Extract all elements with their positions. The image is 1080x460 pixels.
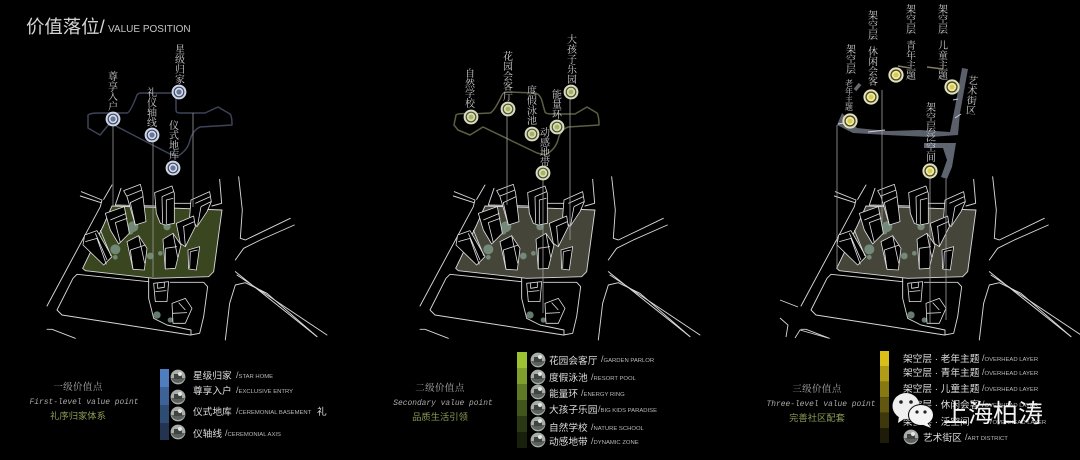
vertical labels: second level — [462, 33, 576, 167]
items: second level: 大孩子乐园 — [549, 403, 597, 416]
panel: second-level value map — [420, 33, 700, 340]
legend: third level — [767, 351, 1046, 444]
items: third level: /ART DISTRICT — [965, 432, 1008, 442]
colour bar: third level — [880, 351, 889, 443]
items: first level: /STAR HOME — [236, 370, 273, 380]
title — [26, 16, 191, 37]
items: third level: /OVERHEAD LAYER — [990, 416, 1046, 426]
vertical labels: third level: 架空层 — [904, 3, 916, 35]
items: first level: /CEREMONIAL BASEMENT — [236, 406, 312, 416]
vertical labels: first level — [106, 44, 184, 160]
account name: 上海柏涛 — [943, 400, 1043, 428]
vertical labels: third level: 休闲会客 — [866, 45, 878, 86]
overhead layer band — [837, 66, 968, 179]
items: second level: /DYNAMIC ZONE — [591, 436, 639, 446]
items: first level: /EXCLUSIVE ENTRY — [236, 385, 293, 395]
markers: second level — [464, 85, 578, 180]
items: first level: 星级归家 — [193, 369, 232, 382]
items: third level: /OVERHEAD LAYER — [982, 353, 1038, 363]
items: third level: 架空层 · 老年主题 — [903, 352, 980, 365]
vertical labels: first level: 仪式地库 — [166, 119, 178, 160]
items: second level: 能量环 — [549, 387, 578, 400]
heading: first level — [30, 381, 139, 421]
legend: second level — [393, 352, 657, 448]
site plan: second level — [420, 177, 700, 340]
vertical labels: second level: 动感地带 — [538, 126, 550, 167]
heading: third level — [767, 383, 876, 423]
route ring: first level — [88, 93, 232, 156]
items: third level: 艺术街区 — [923, 431, 962, 444]
items: third level: 架空层 · 泛空间 — [903, 415, 970, 428]
items: third level: 架空层 · 休闲会客 — [903, 398, 980, 411]
items: second level: 自然学校 — [549, 421, 588, 434]
colour bar: second level — [517, 352, 527, 448]
markers: first level — [106, 85, 186, 175]
icon: wechat bubbles — [892, 393, 934, 428]
heading: first level: First-level value point — [30, 398, 139, 407]
items: second level: 花园会客厅 — [549, 354, 598, 367]
vertical labels: second level: 度假泳池 — [524, 84, 536, 126]
items: first level: 礼 — [317, 405, 327, 418]
heading: second level: 二级价值点 — [415, 382, 465, 394]
colour bar: first level — [160, 369, 169, 440]
thumbnails: second level — [531, 353, 545, 447]
watermark: wechat logo and account name — [892, 393, 1043, 428]
vertical labels: third level: 儿童主题 — [936, 39, 948, 80]
heading: third level: 完善社区配套 — [789, 412, 845, 423]
vertical labels: second level: 自然学校 — [462, 67, 474, 109]
heading: second level — [393, 382, 493, 422]
connector lines: first level — [113, 113, 193, 277]
vertical labels: third level: 架空层 — [866, 9, 878, 41]
route ring: second level — [454, 92, 599, 155]
vertical labels: third level: 架空层 — [936, 3, 948, 35]
thumbnails: first level — [171, 370, 185, 439]
vertical labels: third level: 老年主题 — [844, 78, 854, 112]
heading: second level: 品质生活引领 — [412, 411, 468, 422]
site plan: first level — [47, 177, 327, 340]
vertical labels: first level: 尊享入户 — [106, 71, 118, 112]
items: second level: /GARDEN PARLOR — [601, 354, 654, 364]
vertical labels: third level: 艺术街区 — [963, 73, 978, 115]
heading: third level: 三级价值点 — [792, 383, 842, 395]
vertical labels: first level: 礼仪轴线 — [144, 86, 156, 128]
heading: third level: Three-level value point — [767, 400, 876, 409]
heading: first level: 礼序归家体系 — [50, 410, 106, 421]
items: first level: /CEREMONIAL AXIS — [225, 428, 281, 438]
items: second level: 动感地带 — [549, 435, 588, 448]
items: first level — [193, 369, 327, 440]
items: third level: /OVERHEAD LAYER — [982, 399, 1038, 409]
connector lines: second level — [507, 92, 570, 313]
title: 价值落位/ — [26, 16, 106, 37]
items: third level: 架空层 · 儿童主题 — [903, 382, 980, 395]
heading: first level: 一级价值点 — [53, 381, 103, 393]
items: third level: /OVERHEAD LAYER — [982, 367, 1038, 377]
connector lines: third level — [837, 90, 946, 323]
items: second level: /BIG KIDS PARADISE — [598, 404, 657, 414]
panel: third-level value map — [780, 3, 1080, 340]
items: third level: /OVERHEAD LAYER — [982, 383, 1038, 393]
extra roads: third level — [780, 300, 828, 338]
items: first level: 仪式地库 — [193, 405, 232, 418]
panel: first-level value map — [47, 44, 327, 340]
vertical labels: first level: 星级归家 — [172, 44, 184, 85]
title: VALUE POSITION — [108, 24, 191, 35]
vertical labels: third level: 架空层 — [844, 43, 856, 75]
items: second level: /NATURE SCHOOL — [591, 422, 645, 432]
items: second level: 度假泳池 — [549, 371, 588, 384]
vertical labels: third level: 架空层泛空间 — [924, 101, 936, 162]
items: second level: /ENERGY RING — [581, 388, 625, 398]
items: first level: 仪轴线 — [193, 427, 222, 440]
markers: third level — [842, 67, 960, 179]
heading: second level: Secondary value point — [393, 399, 493, 408]
legend: first level — [30, 369, 327, 440]
site plan: third level — [801, 177, 1080, 340]
items: second level: /RESORT POOL — [591, 372, 637, 382]
vertical labels: second level: 花园会客厅 — [500, 50, 512, 102]
items: third level: 架空层 · 青年主题 — [903, 366, 980, 379]
items: second level — [549, 354, 657, 448]
vertical labels: second level: 能量环 — [550, 88, 562, 120]
items: first level: 尊享入户 — [193, 384, 232, 397]
vertical labels: third level — [844, 3, 978, 162]
vertical labels: second level: 大孩子乐园 — [564, 33, 576, 85]
vertical labels: third level: 青年主题 — [904, 39, 916, 80]
items: third level — [903, 352, 1046, 444]
